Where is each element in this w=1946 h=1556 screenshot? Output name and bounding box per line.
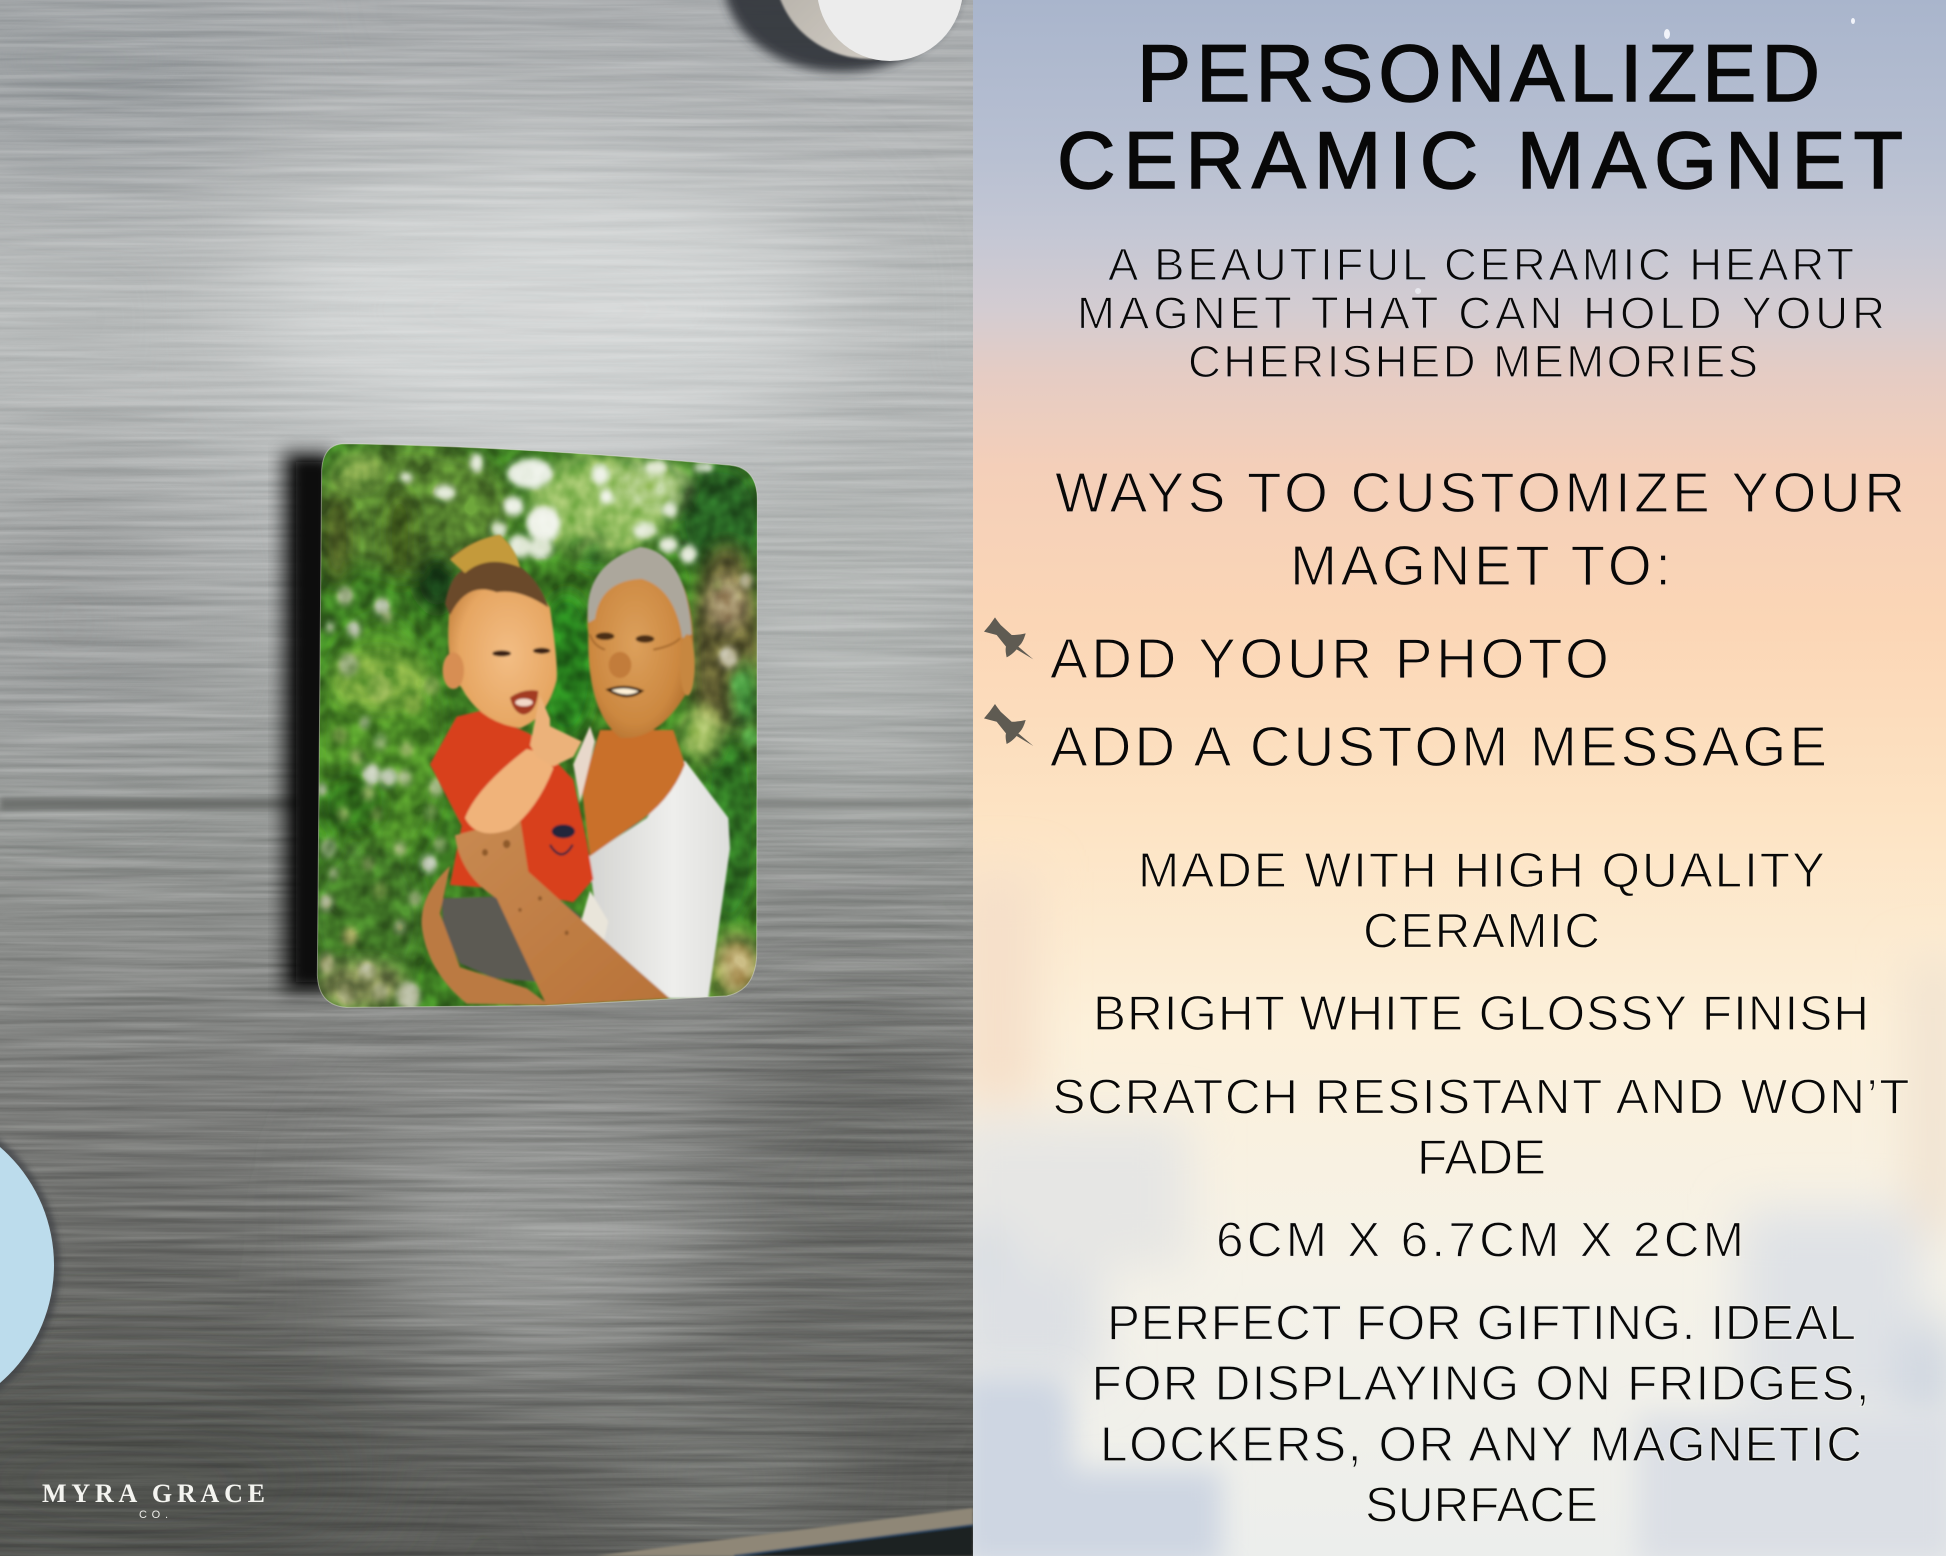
icon: push pin [984, 617, 1033, 659]
panel: brushed metal fridge background [0, 0, 990, 1556]
man holding child [422, 535, 730, 1006]
icon: push pin [984, 704, 1033, 746]
logo: Myra Grace Co.: MYRA GRACE [42, 1479, 265, 1508]
photo blossoms [317, 454, 759, 1010]
feature: scratch resistant [1052, 1070, 1910, 1185]
heading: ways to customize [1055, 461, 1905, 597]
magnet shadow [283, 452, 333, 992]
subtitle: CHERISHED MEMORIES [1188, 336, 1758, 387]
feature: perfect for gifting: SURFACE [1365, 1478, 1598, 1532]
icon: pale blue round magnet left [0, 1137, 62, 1390]
sky sparkles [1369, 18, 1855, 294]
arms [422, 866, 550, 1006]
feature: scratch resistant: FADE [1417, 1130, 1546, 1185]
feature: perfect for gifting: LOCKERS, OR ANY MAGNETIC [1100, 1417, 1862, 1472]
feature: perfect for gifting [1092, 1296, 1870, 1532]
title: PERSONALIZED [1137, 29, 1820, 119]
magnet edge highlight [317, 444, 757, 1007]
skyline blocks [960, 1376, 1946, 1556]
bottom fridge edge [595, 1508, 973, 1556]
title [1060, 44, 1902, 190]
photo background foliage [310, 443, 763, 1009]
heading: ways to customize: MAGNET TO: [1290, 534, 1671, 597]
list item: add your photo: ADD YOUR PHOTO [1050, 627, 1609, 690]
subtitle: A BEAUTIFUL CERAMIC HEART [1108, 239, 1854, 290]
feature: perfect for gifting: FOR DISPLAYING ON FRIDGES, [1092, 1356, 1870, 1411]
logo: Myra Grace Co. [42, 1484, 264, 1518]
list item: add a custom message: ADD A CUSTOM MESSAGE [1050, 715, 1827, 778]
icon: white round magnet top [724, 0, 965, 72]
heading: ways to customize: WAYS TO CUSTOMIZE YOUR [1055, 461, 1905, 524]
feature: glossy finish: BRIGHT WHITE GLOSSY FINISH [1093, 986, 1869, 1041]
feature: high quality ceramic: CERAMIC [1363, 904, 1600, 959]
logo: Myra Grace Co.: CO. [139, 1509, 168, 1521]
foliage texture [313, 439, 763, 1013]
child [442, 895, 582, 982]
subtitle: MAGNET THAT CAN HOLD YOUR [1077, 288, 1885, 338]
panel: sunset skyline background [950, 0, 1946, 1556]
feature: perfect for gifting: PERFECT FOR GIFTING. IDEAL [1107, 1296, 1856, 1350]
feature: high quality ceramic [1138, 843, 1825, 959]
title: CERAMIC MAGNET [1057, 116, 1903, 206]
subtitle [1077, 239, 1885, 387]
seam line in the fridge door [0, 798, 973, 818]
feature: high quality ceramic: MADE WITH HIGH QUALITY [1138, 843, 1825, 898]
panel: photo magnet [310, 439, 763, 1013]
feature: dimensions: 6CM X 6.7CM X 2CM [1216, 1212, 1744, 1268]
feature: scratch resistant: SCRATCH RESISTANT AND WON’T [1052, 1070, 1910, 1124]
